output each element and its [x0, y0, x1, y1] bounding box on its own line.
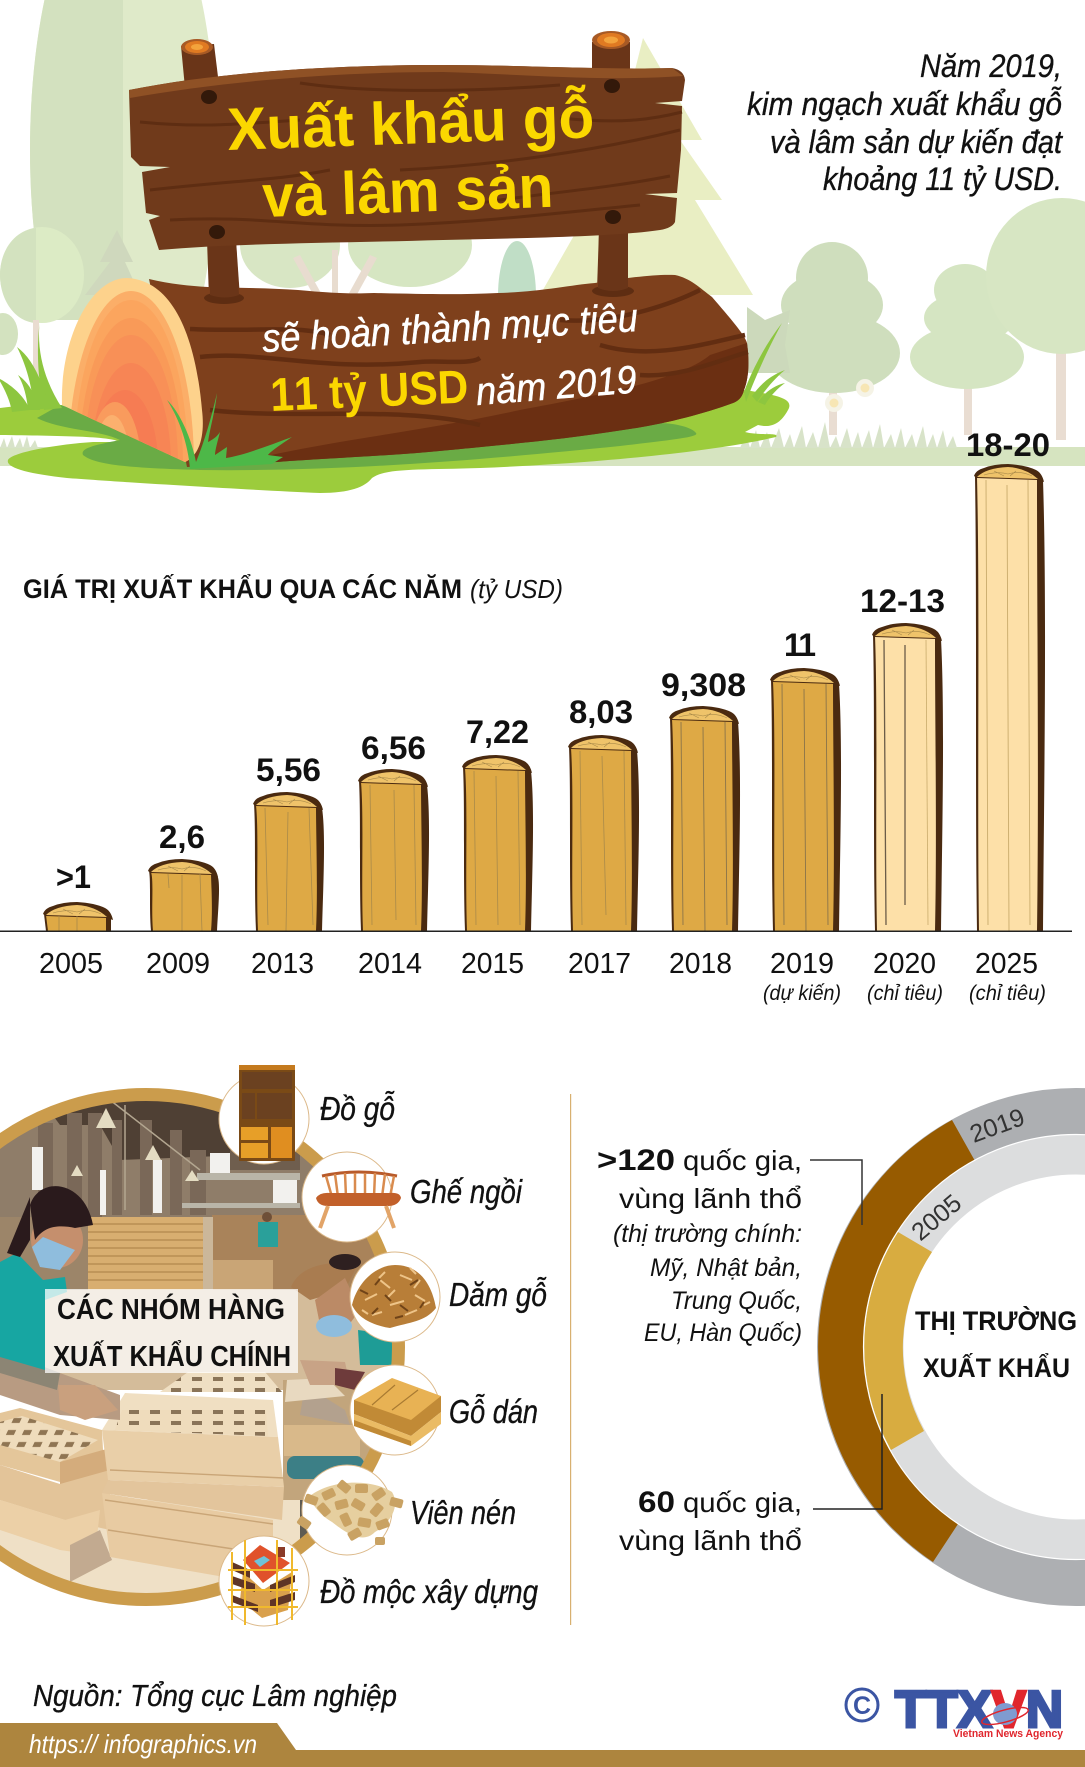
year axis labels: (dự kiến) [763, 982, 841, 1005]
bar 2014 [358, 769, 429, 931]
bar value labels: >1 [56, 859, 91, 895]
top-right note: và lâm sản dự kiến đạt [770, 124, 1063, 160]
market callout: 2005: 60 [638, 1486, 675, 1519]
year axis labels: 2020 [873, 948, 936, 980]
title: Xuất khẩu gỗ [226, 83, 595, 163]
bar 2005 [43, 902, 113, 931]
title [226, 83, 595, 230]
bar value labels: 2,6 [159, 819, 205, 855]
log cut face with rings [62, 278, 203, 462]
export group labels: Gỗ dán [449, 1393, 538, 1430]
year axis labels: 2025 [975, 948, 1038, 980]
sign posts [181, 31, 630, 301]
background scenery: trees and ground [0, 0, 1085, 466]
chart baseline [0, 930, 1072, 932]
bar 2013 [253, 792, 324, 931]
donut year label 2005: 2005 [906, 1189, 967, 1246]
year axis labels: (chỉ tiêu) [867, 982, 943, 1005]
logo: copyright mark [846, 1689, 878, 1721]
year axis labels: 2015 [461, 948, 524, 980]
grass mound [0, 390, 789, 493]
market callout: 2019: Trung Quốc, [671, 1287, 802, 1315]
market callout: 2019: EU, Hàn Quốc) [644, 1319, 802, 1347]
export group labels: Viên nén [410, 1494, 516, 1531]
factory photo in circle [0, 1090, 403, 1600]
export group labels: Ghế ngồi [410, 1173, 523, 1210]
year axis labels: 2018 [669, 948, 732, 980]
year axis labels: 2013 [251, 948, 314, 980]
market callout: 2019: Mỹ, Nhật bản, [650, 1254, 802, 1282]
bar value labels: 18-20 [966, 427, 1050, 463]
year axis labels: 2014 [358, 948, 422, 980]
logo: TTXVN: TTXVN [895, 1681, 1063, 1739]
logo: copyright mark: C [853, 1692, 871, 1720]
icon: house construction [219, 1536, 309, 1626]
icon: bench [302, 1152, 401, 1242]
export group labels: Đồ gỗ [320, 1090, 395, 1127]
title: và lâm sản [261, 153, 554, 230]
year axis labels: 2009 [146, 948, 210, 980]
icon: cabinet [219, 1065, 309, 1164]
market callout: 2019: >120 [597, 1144, 675, 1177]
subtitle on log: sẽ hoàn thành mục tiêu [261, 296, 639, 361]
bar value labels: 9,308 [661, 667, 746, 703]
sign nails [201, 79, 621, 239]
bar value labels: 7,22 [466, 714, 529, 750]
year axis labels: 2005 [39, 948, 103, 980]
bar value labels: 6,56 [361, 730, 426, 766]
leader line: 2019 [810, 1160, 862, 1225]
market callout: 2019: quốc gia, [683, 1145, 802, 1176]
market callout: 2019 [597, 1144, 802, 1347]
icon: wood pellets [296, 1465, 404, 1555]
year axis labels [39, 948, 1046, 1005]
log [149, 230, 748, 467]
donut year label 2019: 2019 [966, 1103, 1028, 1149]
bar 2017 [568, 735, 639, 931]
donut centre title [915, 1305, 1077, 1383]
bar value labels [56, 427, 1050, 895]
subtitle on log [261, 296, 639, 421]
bar 2015 [462, 755, 533, 931]
export group labels: Đồ mộc xây dựng [320, 1573, 539, 1610]
label box: main export groups: XUẤT KHẨU CHÍNH [53, 1339, 291, 1373]
chart heading: GIÁ TRỊ XUẤT KHẨU QUA CÁC NĂM [23, 573, 462, 604]
market callout: 2005: vùng lãnh thổ [619, 1525, 802, 1556]
donut: export markets [818, 1103, 1085, 1582]
source note: Nguồn: Tổng cục Lâm nghiệp [33, 1678, 397, 1713]
bar 2019 [770, 668, 841, 931]
signboard [129, 65, 685, 250]
centre grass blades [167, 393, 292, 469]
flowers [825, 379, 874, 412]
logo: TTXVN: Vietnam News Agency [953, 1728, 1064, 1740]
year axis labels: 2017 [568, 948, 631, 980]
top-right note [747, 48, 1063, 197]
top-right note: kim ngạch xuất khẩu gỗ [747, 86, 1062, 122]
donut centre title: THỊ TRƯỜNG [915, 1305, 1077, 1336]
subtitle on log: 11 tỷ USD [269, 359, 469, 421]
left grass blades [0, 319, 62, 412]
bar chart: export value logs [43, 464, 1045, 931]
leader line: 2005 [813, 1394, 882, 1509]
bar value labels: 12-13 [860, 583, 945, 619]
market callout: 2005 [619, 1486, 802, 1556]
market callout: 2019: vùng lãnh thổ [619, 1183, 802, 1214]
top-right note: khoảng 11 tỷ USD. [823, 161, 1062, 197]
export group labels: Dăm gỗ [449, 1276, 547, 1313]
gold ring around photo [0, 1094, 398, 1600]
vertical divider [570, 1094, 571, 1625]
footer banner: https:// infographics.vn [29, 1729, 257, 1759]
label box: main export groups [45, 1289, 298, 1373]
icon: wood chips [350, 1252, 440, 1342]
right grass blades [744, 323, 785, 405]
chart heading: (tỷ USD) [470, 574, 563, 604]
bar value labels: 5,56 [256, 752, 321, 788]
subtitle on log: năm 2019 [474, 358, 638, 414]
year axis labels: 2019 [770, 948, 834, 980]
top-right note: Năm 2019, [920, 48, 1062, 84]
export group labels [320, 1090, 547, 1610]
bar value labels: 8,03 [569, 694, 633, 730]
bar 2018 [669, 706, 740, 931]
icon: plywood [350, 1365, 441, 1455]
bar value labels: 11 [784, 627, 816, 663]
bar 2025 [974, 464, 1045, 931]
footer banner [0, 1723, 1085, 1767]
market callout: 2019: (thị trường chính: [613, 1220, 802, 1248]
donut centre title: XUẤT KHẨU [923, 1352, 1070, 1383]
year axis labels: (chỉ tiêu) [969, 982, 1046, 1005]
label box: main export groups: CÁC NHÓM HÀNG [57, 1292, 285, 1326]
bar 2020 [872, 623, 943, 931]
market callout: 2005: quốc gia, [683, 1487, 802, 1518]
bar 2009 [148, 859, 219, 931]
